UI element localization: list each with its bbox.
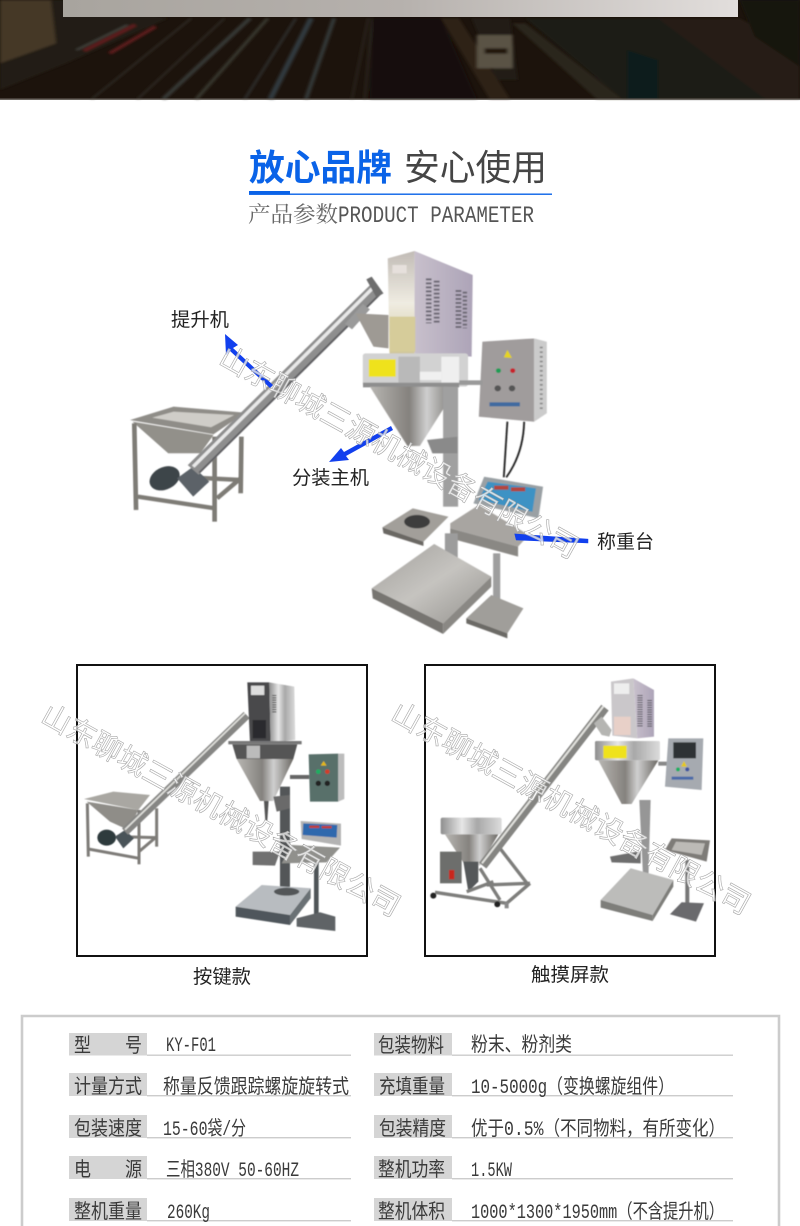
base [236,885,311,925]
subtitle [248,202,534,229]
scale post and foot [466,553,523,638]
housing [611,678,654,738]
column [280,787,290,893]
cone [598,760,658,804]
display console [473,477,543,518]
bracket [273,795,290,812]
parameter row 3: 包装精度 [379,1117,446,1142]
product frame: button model [77,665,367,956]
wheeled frame [435,848,530,903]
hopper stand [84,792,157,864]
control box [658,738,703,790]
parameter row 1: 粉末、粉剂类 [471,1033,572,1058]
weighing platform [450,505,529,557]
parameter row 1: 包装物料 [378,1034,444,1059]
guard ring with yellow label [363,353,468,387]
parameter row 2: 称量反馈跟踪螺旋旋转式 [163,1075,349,1100]
cone [237,759,293,801]
parameter row 4: 1.5KW [471,1160,512,1183]
scale post [685,860,689,903]
tray with vent [382,508,448,546]
caption: button model: 按键款 [193,966,251,988]
discharge chute [356,313,388,348]
lower pillar [445,533,458,567]
watermark: button model: 山东聊城三源机械设备有限公司 [36,698,406,923]
left tray [253,852,280,866]
scale shelf [282,845,340,863]
parameter row 2: 10-5000g（变换螺旋组件） [471,1075,674,1100]
base plate [372,544,491,634]
column [639,800,651,882]
base [601,868,673,921]
lift tube [125,713,247,832]
watermark: main diagram: 山东聊城三源机械设备有限公司 [214,340,584,565]
main machine diagram [130,251,547,638]
parameter row 5: 260Kg [167,1202,210,1225]
title [249,147,547,188]
caption: touch screen model: 触摸屏款 [531,964,609,986]
parameter row 5 [69,1198,733,1225]
parameter row 3: 15-60袋/分 [163,1117,246,1142]
ring and bowl [228,741,302,759]
parameter row 5: 1000*1300*1950mm（不含提升机） [471,1200,724,1225]
servo housing [388,251,473,357]
guard ring with label [595,741,660,760]
parameter row 1: KY-F01 [166,1035,216,1058]
product frame: touch screen model [425,665,715,956]
parameter row 4: 电 [74,1158,91,1183]
scale foot [670,902,704,922]
parameter row 3 [69,1115,733,1142]
cone bracket [427,437,457,453]
control box [459,338,547,422]
arrow: to lift tube [225,334,273,388]
parameter row 3: 包装速度 [74,1117,142,1142]
subtitle: PRODUCT PARAMETER [338,203,534,229]
control box [290,754,344,802]
cables [504,422,524,477]
label: scale: 称重台 [597,531,654,553]
parameter row 5: 整机重量 [74,1200,142,1225]
arrow: to main unit [329,426,393,462]
parameter row 3: 优于0.5%（不同物料，有所变化） [471,1117,725,1142]
scale pan [665,838,710,862]
parameter row 1: 号 [125,1035,142,1059]
lift tube [482,706,612,866]
parameter row 4: 整机功率 [378,1158,445,1183]
top concrete strip [63,0,738,17]
display [301,821,341,846]
wheels [430,893,509,908]
banner photo: dark highway [0,0,800,100]
post and foot [297,862,335,931]
parameter row 4: 源 [125,1158,142,1183]
title: 安心使用 [404,147,547,188]
inclined lift tube [193,277,383,473]
motor box [440,852,478,892]
parameter panel [22,1016,779,1226]
mixing hopper [441,818,502,866]
left tray [610,851,641,863]
watermark: touch screen model: 山东聊城三源机械设备有限公司 [386,696,756,921]
label: lift: 提升机 [171,309,229,331]
parameter row 5: 整机体积 [378,1200,445,1225]
parameter row 2 [69,1073,733,1100]
feed hopper with stand [130,407,245,522]
parameter row 4 [69,1156,733,1183]
parameter row 2: 充填重量 [379,1075,445,1100]
hopper cone [370,387,457,446]
housing [247,682,295,742]
parameter row 2: 计量方式 [74,1075,142,1100]
title: 放心品牌 [249,147,392,188]
arrow: to weighing table [516,535,587,542]
nozzle [264,801,269,821]
parameter row 1: 型 [74,1034,91,1059]
column [443,387,458,507]
title underline [249,191,552,195]
label: main unit: 分装主机 [292,467,369,489]
parameter row 4: 三相380V 50-60HZ [166,1158,299,1183]
subtitle: 产品参数 [248,202,338,227]
parameter row 1 [69,1033,733,1059]
